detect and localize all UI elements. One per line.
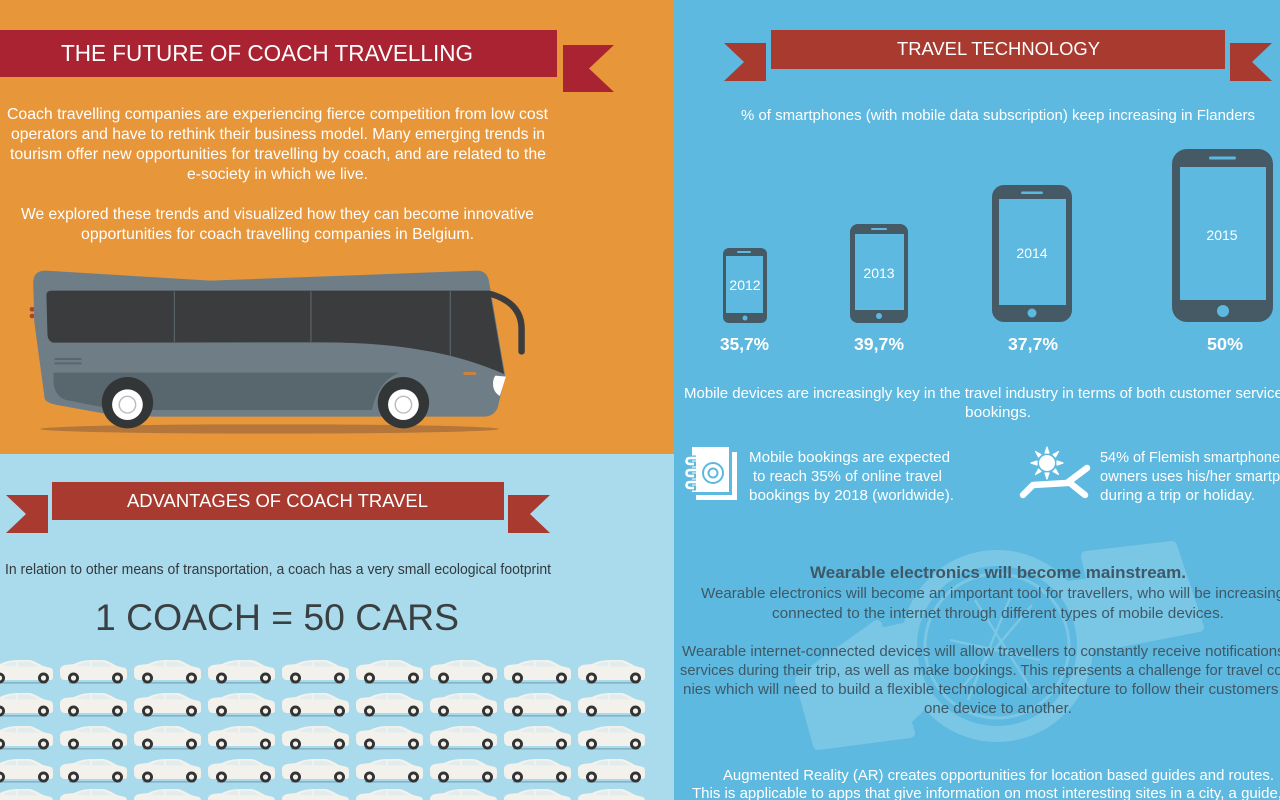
heading banner: advantages of coach travel [6,482,550,533]
text: smartphone chart title: % of smartphones (with mobile data subscription) keep increasing in Flanders [741,108,1255,124]
text block: introduction: operators and have to rethink their business model. Many emerging trends in [11,126,545,143]
heading banner: the future of coach travelling [0,30,614,92]
phone 2012 [723,248,767,323]
text block: wearable electronics body: connected to the internet through different types of mobile devices. [772,605,1224,622]
panel: light blue advantages background [0,454,674,800]
text: ecological footprint statement: In relation to other means of transportation, a coach has a very small ecological footprint [5,562,551,578]
heading: 1 coach equals 50 cars: 1 COACH = 50 CARS [95,597,459,638]
text: mobile bookings forecast: to reach 35% of online travel [753,468,942,485]
text block: introduction: Coach travelling companies are experiencing fierce competition from low cost [7,106,549,123]
chart: smartphone share by year [720,149,1273,354]
percentage values [720,334,1243,354]
text block: introduction: tourism offer new opportunities for travelling by coach, and are related to the [10,146,546,163]
text block: wearable electronics body [680,585,1280,717]
phone 2012: 2012 [729,277,761,293]
text block: augmented reality: Augmented Reality (AR) creates opportunities for location based guides and routes. [723,767,1274,784]
text: Flemish smartphone owners: during a trip or holiday. [1100,487,1255,504]
illustration: coach bus [30,271,522,434]
percentage values: 50% [1207,334,1243,354]
watermark: wearable devices illustration [800,546,1199,745]
icon: sun and sun lounger [1023,447,1087,495]
text block: introduction: We explored these trends and visualized how they can become innovative [21,206,534,223]
phone 2013 [850,224,908,323]
text block: introduction: opportunities for coach travelling companies in Belgium. [81,226,474,243]
text block: mobile devices key in travel [684,385,1280,421]
heading banner: travel technology [724,30,1272,81]
phone 2013: 2013 [863,265,895,281]
heading: wearable electronics: Wearable electronics will become mainstream. [810,564,1186,582]
heading banner: the future of coach travelling: THE FUTURE OF COACH TRAVELLING [61,40,473,66]
panel: orange intro background [0,0,674,454]
icon: address book [686,447,737,500]
text: mobile bookings forecast: Mobile bookings are expected [749,449,950,466]
text: mobile bookings forecast [749,449,954,504]
text block: wearable electronics body: Wearable electronics will become an important tool for travellers, who will be increasingly [701,585,1280,602]
panel: blue technology background [674,0,1280,800]
heading banner: travel technology: TRAVEL TECHNOLOGY [897,38,1100,59]
phone 2015: 2015 [1206,227,1238,243]
pictogram: rows of cars [0,660,645,800]
text: mobile bookings forecast: bookings by 2018 (worldwide). [749,487,954,504]
phone 2014 [992,185,1072,322]
phone 2015 [1172,149,1273,322]
text block: wearable electronics body: one device to another. [924,700,1072,717]
percentage values: 37,7% [1008,334,1058,354]
percentage values: 39,7% [854,334,904,354]
text block: introduction [7,106,549,243]
text block: introduction: e-society in which we live. [187,166,368,183]
text: Flemish smartphone owners [1100,449,1280,504]
phone 2014: 2014 [1016,245,1048,261]
text block: augmented reality [692,767,1280,800]
percentage values: 35,7% [720,334,769,354]
text block: mobile devices key in travel: bookings. [965,404,1031,421]
heading banner: advantages of coach travel: ADVANTAGES OF COACH TRAVEL [127,490,428,511]
